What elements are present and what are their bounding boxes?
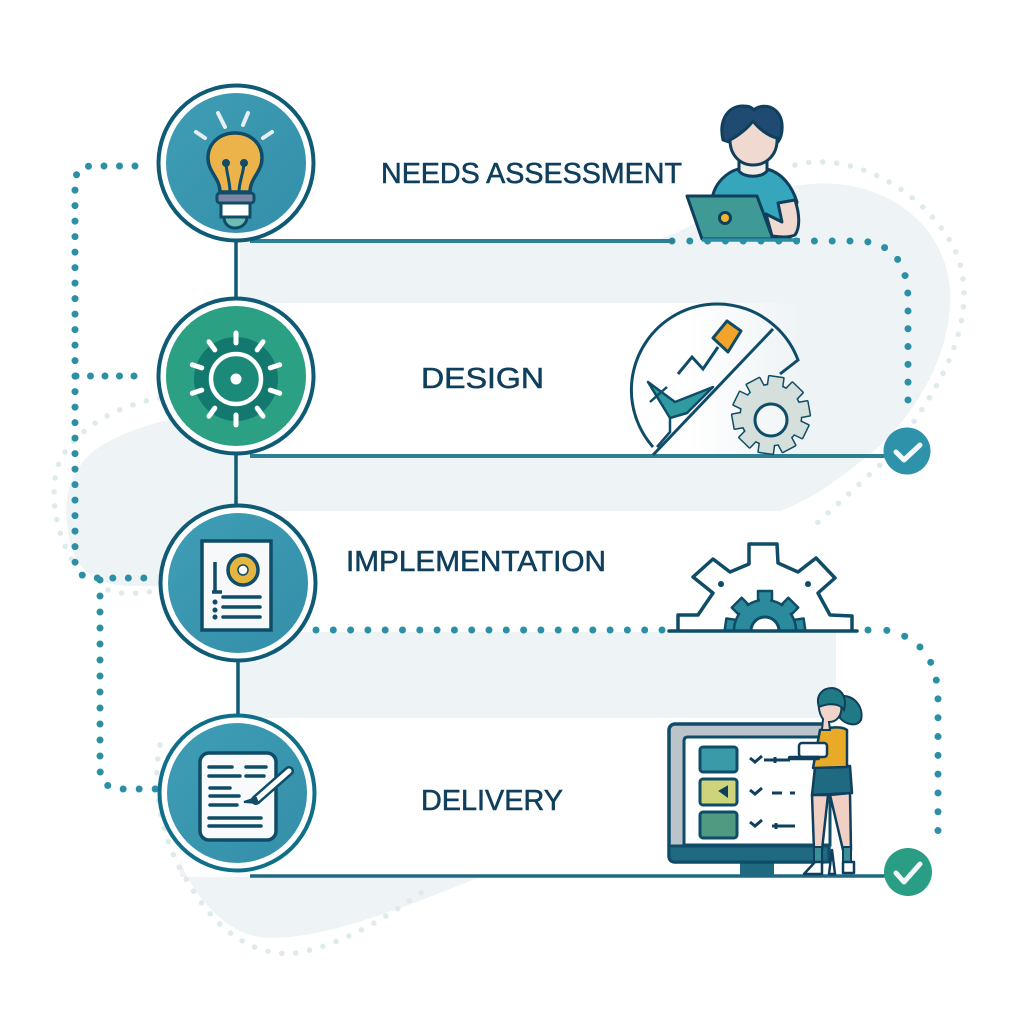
background shape: lower blob bbox=[180, 860, 480, 938]
gear hub bbox=[230, 374, 242, 384]
document lines bbox=[223, 597, 260, 617]
bulb collar bbox=[217, 193, 254, 203]
gear body bbox=[194, 337, 278, 421]
document bullets bbox=[212, 602, 218, 617]
background shape: implementation band bbox=[240, 632, 836, 718]
illustration: person with laptop bbox=[687, 106, 800, 240]
hair bbox=[722, 106, 782, 142]
gear teeth outline bbox=[732, 376, 810, 454]
pencil outline bbox=[256, 771, 289, 800]
small teal gear bbox=[724, 590, 806, 630]
heading: needs assessment: NEEDS ASSESSMENT bbox=[381, 158, 682, 190]
person hair bbox=[818, 688, 845, 710]
arm bbox=[766, 200, 799, 237]
step 2 icon badge: gear bbox=[158, 298, 314, 454]
bulb tip bbox=[224, 217, 247, 228]
pencil tip bbox=[244, 798, 258, 803]
left dotted connector: delivery branch bbox=[100, 580, 156, 789]
dotted connector: implementation row bbox=[316, 626, 668, 634]
bulb filaments bbox=[226, 164, 244, 192]
monitor stand bbox=[740, 860, 774, 875]
background shape: upper right blob bbox=[240, 183, 950, 511]
step 1 icon badge: light bulb bbox=[158, 86, 314, 240]
orange marker bbox=[713, 321, 741, 352]
person shoes bbox=[804, 850, 854, 874]
heading: implementation: IMPLEMENTATION bbox=[346, 546, 606, 578]
plane struts bbox=[650, 387, 670, 447]
checklist box one bbox=[700, 747, 737, 772]
pencil body bbox=[256, 771, 289, 800]
large gear outline bbox=[678, 544, 852, 630]
checklist box two bbox=[700, 779, 737, 805]
illustration: half gear bbox=[667, 542, 859, 633]
document mark bbox=[212, 562, 222, 592]
heading: design: DESIGN bbox=[421, 363, 544, 395]
person face bbox=[819, 699, 841, 730]
illustration: plane and gear chart bbox=[631, 304, 810, 455]
decorative dashed outline: upper right bbox=[795, 162, 964, 525]
decorative dashed outline: lower bbox=[157, 745, 425, 954]
step 3 icon badge: document bbox=[160, 506, 316, 660]
step 4 icon badge: notepad and pencil bbox=[160, 716, 314, 870]
background shape: left blob bbox=[66, 412, 240, 586]
dial arc bbox=[631, 304, 798, 447]
monitor screen bbox=[684, 737, 830, 845]
trend line bbox=[678, 347, 718, 374]
gear baseline bbox=[669, 629, 857, 633]
bulb base bbox=[221, 203, 250, 217]
laptop base bbox=[702, 238, 800, 242]
check mark bbox=[896, 445, 920, 460]
laptop dot bbox=[720, 212, 730, 224]
left dotted connector: outer bbox=[75, 166, 158, 578]
face bbox=[730, 121, 777, 165]
person forearm bbox=[790, 756, 818, 760]
checklist box three bbox=[700, 812, 737, 838]
person ponytail bbox=[840, 696, 862, 724]
neck bbox=[739, 160, 767, 176]
right dotted connector: implementation to check bbox=[868, 630, 938, 845]
row line: delivery bbox=[250, 874, 886, 878]
person shorts bbox=[812, 766, 852, 795]
monitor frame bbox=[669, 724, 829, 862]
dial diagonal bbox=[653, 329, 773, 455]
background shape: design row white area bbox=[240, 303, 800, 456]
document seal centre bbox=[238, 565, 248, 575]
heading: delivery: DELIVERY bbox=[421, 785, 563, 817]
gear hole bbox=[755, 404, 787, 436]
row line: design bbox=[250, 454, 886, 458]
box two arrow bbox=[720, 787, 727, 796]
notepad text lines bbox=[209, 767, 266, 826]
bulb rays bbox=[196, 113, 272, 138]
illustration: monitor with checklist and person bbox=[669, 688, 862, 875]
gear rivets bbox=[721, 581, 808, 587]
gear spokes bbox=[192, 333, 280, 425]
bulb glass bbox=[208, 133, 262, 192]
person held tablet bbox=[799, 743, 827, 757]
gear ring bbox=[211, 354, 261, 404]
person legs bbox=[812, 793, 851, 850]
vertical timeline spine bbox=[236, 240, 238, 720]
notepad bbox=[200, 753, 276, 840]
shirt bbox=[712, 169, 797, 238]
person socks bbox=[814, 847, 851, 862]
checklist marks bbox=[750, 756, 795, 829]
bulb filament tips bbox=[226, 159, 244, 167]
gear teeth fill bbox=[732, 376, 810, 454]
laptop bbox=[687, 196, 773, 239]
check mark bbox=[896, 864, 920, 882]
check badge: design bbox=[884, 428, 930, 474]
left dotted connector: design branch bbox=[76, 372, 146, 380]
check badge: delivery bbox=[884, 848, 932, 896]
document seal bbox=[228, 555, 258, 585]
monitor base band bbox=[669, 846, 829, 862]
plane bbox=[648, 382, 713, 418]
right dotted connector: needs to check bbox=[672, 241, 908, 410]
row line: needs assessment bbox=[250, 239, 674, 243]
person top bbox=[813, 727, 847, 768]
document sheet bbox=[202, 541, 271, 630]
decorative dashed outline: left bbox=[54, 398, 160, 593]
